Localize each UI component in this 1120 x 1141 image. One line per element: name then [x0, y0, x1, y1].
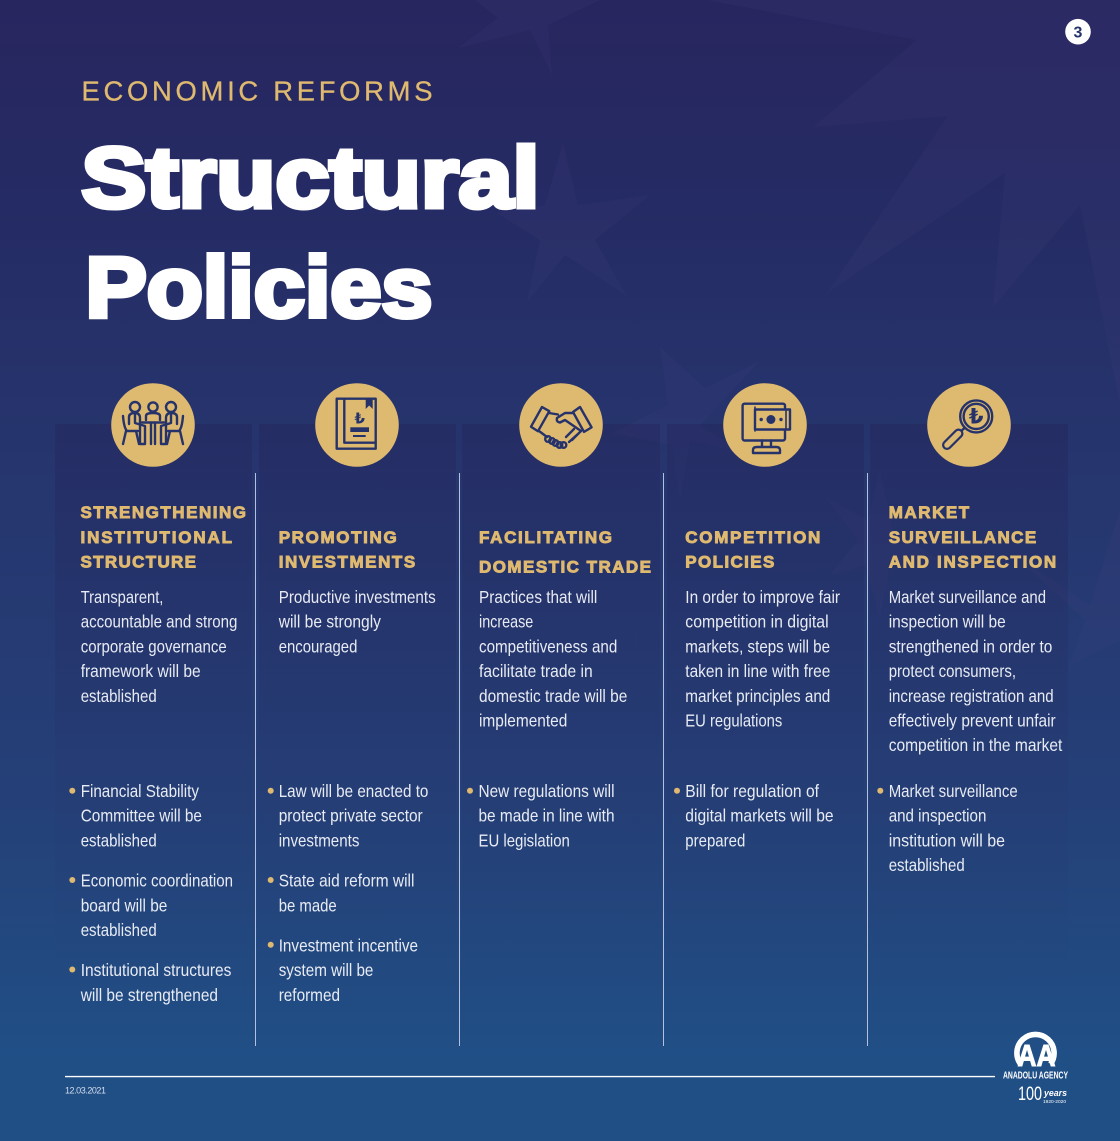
description: increase registration and — [889, 686, 1054, 706]
logo: Anadolu Agency 100 years: ANADOLU AGENCY — [1003, 1070, 1068, 1082]
bullet list — [674, 781, 834, 850]
icon: magnifier over lira coin: ₺ — [969, 404, 984, 428]
description: corporate governance — [81, 636, 227, 656]
heading: SURVEILLANCE — [889, 528, 1036, 547]
logo: Anadolu Agency 100 years: AA — [1018, 1038, 1056, 1073]
description: competition in digital — [685, 612, 829, 632]
bullet list: institution will be — [889, 830, 1005, 850]
heading: INVESTMENTS — [279, 552, 415, 572]
bullet list: board will be — [81, 895, 167, 915]
bullet list: protect private sector — [279, 806, 423, 826]
panel: facilitating domestic trade — [462, 383, 660, 1046]
description: competition in the market — [889, 735, 1063, 755]
bullet list: be made — [279, 895, 337, 915]
logo: Anadolu Agency 100 years: 1920-2020 — [1043, 1099, 1066, 1104]
description: framework will be — [81, 661, 201, 681]
description: Transparent, — [81, 587, 163, 607]
bullet list: Committee will be — [81, 806, 202, 826]
description: will be strongly — [278, 612, 381, 632]
description: Market surveillance and — [889, 587, 1046, 607]
bullet list: EU legislation — [478, 830, 570, 850]
bullet list: will be strengthened — [80, 985, 218, 1005]
bullet list: investments — [279, 830, 360, 850]
panel: market surveillance and inspection — [870, 383, 1068, 1046]
bullet list: system will be — [279, 960, 373, 980]
title — [82, 131, 540, 336]
heading — [889, 503, 1056, 572]
icon: book with lira sign — [315, 383, 399, 467]
description — [278, 587, 436, 656]
heading: STRENGTHENING — [80, 503, 246, 522]
heading: COMPETITION — [685, 528, 820, 547]
heading: MARKET — [889, 503, 970, 522]
heading: PROMOTING — [279, 528, 397, 547]
bullet list: and inspection — [889, 806, 986, 826]
decorative background stars — [458, 0, 1120, 665]
description: domestic trade will be — [479, 686, 627, 706]
bullet list: established — [81, 920, 157, 940]
title: Policies — [86, 240, 432, 336]
description: In order to improve fair — [685, 587, 840, 607]
heading — [479, 528, 651, 577]
description: market principles and — [685, 686, 830, 706]
bullet list — [268, 781, 428, 1005]
heading — [279, 528, 415, 572]
page number badge — [1065, 19, 1091, 44]
heading — [685, 528, 820, 572]
heading — [80, 503, 246, 572]
bullet list: Market surveillance — [889, 781, 1018, 801]
heading: STRUCTURE — [80, 552, 196, 572]
bullet list: Economic coordination — [81, 871, 233, 891]
bullet list: Investment incentive — [279, 936, 418, 956]
description: competitiveness and — [479, 636, 617, 656]
panel: competition policies — [667, 383, 864, 1046]
description: encouraged — [279, 636, 357, 656]
icon: book with lira sign: ₺ — [354, 410, 365, 428]
heading: AND INSPECTION — [889, 552, 1056, 572]
description: established — [81, 686, 157, 706]
description: implemented — [479, 710, 567, 730]
description: protect consumers, — [889, 661, 1016, 681]
title: Structural — [82, 131, 540, 226]
bullet list: digital markets will be — [685, 806, 834, 826]
page number badge: 3 — [1074, 24, 1083, 42]
description — [889, 587, 1063, 755]
date: 12.03.2021 — [65, 1086, 106, 1096]
bullet list: prepared — [685, 830, 745, 850]
bullet list: established — [889, 855, 965, 875]
bullet list: be made in line with — [478, 806, 614, 826]
eyebrow heading: ECONOMIC REFORMS — [82, 76, 432, 107]
bullet list — [877, 781, 1018, 875]
panel: strengthening institutional structure — [55, 383, 252, 1046]
bullet list: Bill for regulation of — [685, 781, 819, 801]
description: facilitate trade in — [479, 661, 593, 681]
heading: DOMESTIC TRADE — [479, 558, 651, 577]
bullet list: Law will be enacted to — [279, 781, 428, 801]
heading: POLICIES — [685, 552, 774, 572]
bullet list: established — [81, 830, 157, 850]
panel: promoting investments — [259, 383, 456, 1046]
description: effectively prevent unfair — [889, 710, 1056, 730]
description: Practices that will — [479, 587, 597, 607]
heading: FACILITATING — [479, 528, 612, 547]
icon: handshake — [519, 383, 603, 467]
description: Productive investments — [279, 587, 436, 607]
logo: Anadolu Agency 100 years: 100 — [1018, 1084, 1042, 1105]
description: accountable and strong — [81, 612, 237, 632]
description — [685, 587, 840, 730]
description — [479, 587, 627, 730]
heading: INSTITUTIONAL — [80, 528, 232, 547]
icon: monitor with banknote — [723, 383, 807, 467]
description: EU regulations — [685, 710, 783, 730]
description: taken in line with free — [685, 661, 830, 681]
bullet list: reformed — [279, 985, 340, 1005]
bullet list: Institutional structures — [81, 960, 232, 980]
description: inspection will be — [889, 612, 1006, 632]
description: increase — [479, 612, 533, 632]
description: strengthened in order to — [889, 636, 1052, 656]
description — [81, 587, 237, 706]
logo: Anadolu Agency 100 years: years — [1043, 1088, 1067, 1098]
icon: people at a table — [111, 383, 195, 467]
description: markets, steps will be — [685, 636, 830, 656]
bullet list — [467, 781, 614, 850]
logo: Anadolu Agency 100 years — [1003, 1034, 1068, 1105]
bullet list: New regulations will — [478, 781, 614, 801]
bullet list: State aid reform will — [279, 871, 414, 891]
bullet list: Financial Stability — [81, 781, 199, 801]
bullet list — [69, 781, 233, 1005]
icon: magnifier over lira coin — [927, 383, 1011, 467]
